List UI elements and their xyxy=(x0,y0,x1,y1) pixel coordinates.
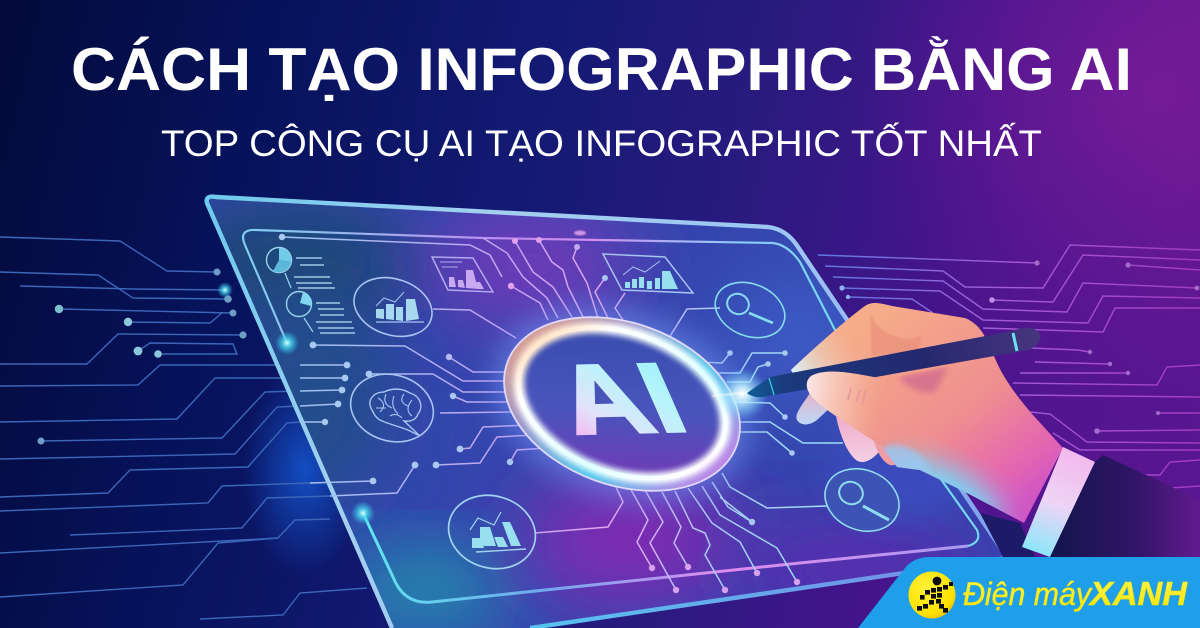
hand xyxy=(747,300,1200,557)
emblem outer ring xyxy=(480,286,764,522)
circuit traces: tablet xyxy=(279,234,843,593)
tablet xyxy=(160,195,1015,628)
AI emblem xyxy=(466,272,778,536)
logo wordmark: Điện máy xyxy=(963,576,1093,612)
icon: magnifier bottom xyxy=(816,458,908,542)
suit sleeve xyxy=(1050,455,1200,557)
icon: magnifier top xyxy=(707,272,793,348)
logo wordmark bold: XANH xyxy=(1088,575,1188,612)
icon: pie charts and text list xyxy=(266,248,355,333)
tablet rim bottom edge xyxy=(530,558,1006,628)
circuit traces: left side xyxy=(0,237,367,619)
finger: back little finger xyxy=(796,393,834,424)
emblem inner disc xyxy=(498,301,746,505)
emblem light ring xyxy=(498,301,746,505)
pen glow xyxy=(712,368,772,420)
finger: little finger xyxy=(873,430,899,465)
icon: chart circle bottom xyxy=(440,485,544,579)
index finger and palm xyxy=(807,359,1063,523)
tablet outer rim xyxy=(207,197,1006,628)
dark shadow beneath hand xyxy=(980,513,1035,557)
subtitle: TOP CÔNG CỤ AI TẠO INFOGRAPHIC TỐT NHẤT xyxy=(161,122,1042,164)
logo panel xyxy=(858,557,1200,628)
thumb and back of hand xyxy=(791,303,998,385)
circuit traces: right side xyxy=(818,245,1200,488)
shirt cuff xyxy=(1022,447,1095,557)
finger: ring finger xyxy=(835,410,884,462)
icon: chart box 1 xyxy=(432,257,493,292)
inner frame top xyxy=(243,230,978,546)
icon: chart box 2 xyxy=(603,254,693,293)
inner frame bottom xyxy=(363,513,968,602)
AI text: AI xyxy=(536,342,702,455)
title: CÁCH TẠO INFOGRAPHIC BẰNG AI xyxy=(71,36,1132,103)
glow dots on tablet frame xyxy=(275,230,586,525)
logo disc with running figure xyxy=(908,572,956,618)
emblem glow xyxy=(466,272,778,536)
icon: brain circle xyxy=(343,365,441,451)
pen xyxy=(747,328,1040,397)
icon: chart circle top xyxy=(346,268,440,346)
